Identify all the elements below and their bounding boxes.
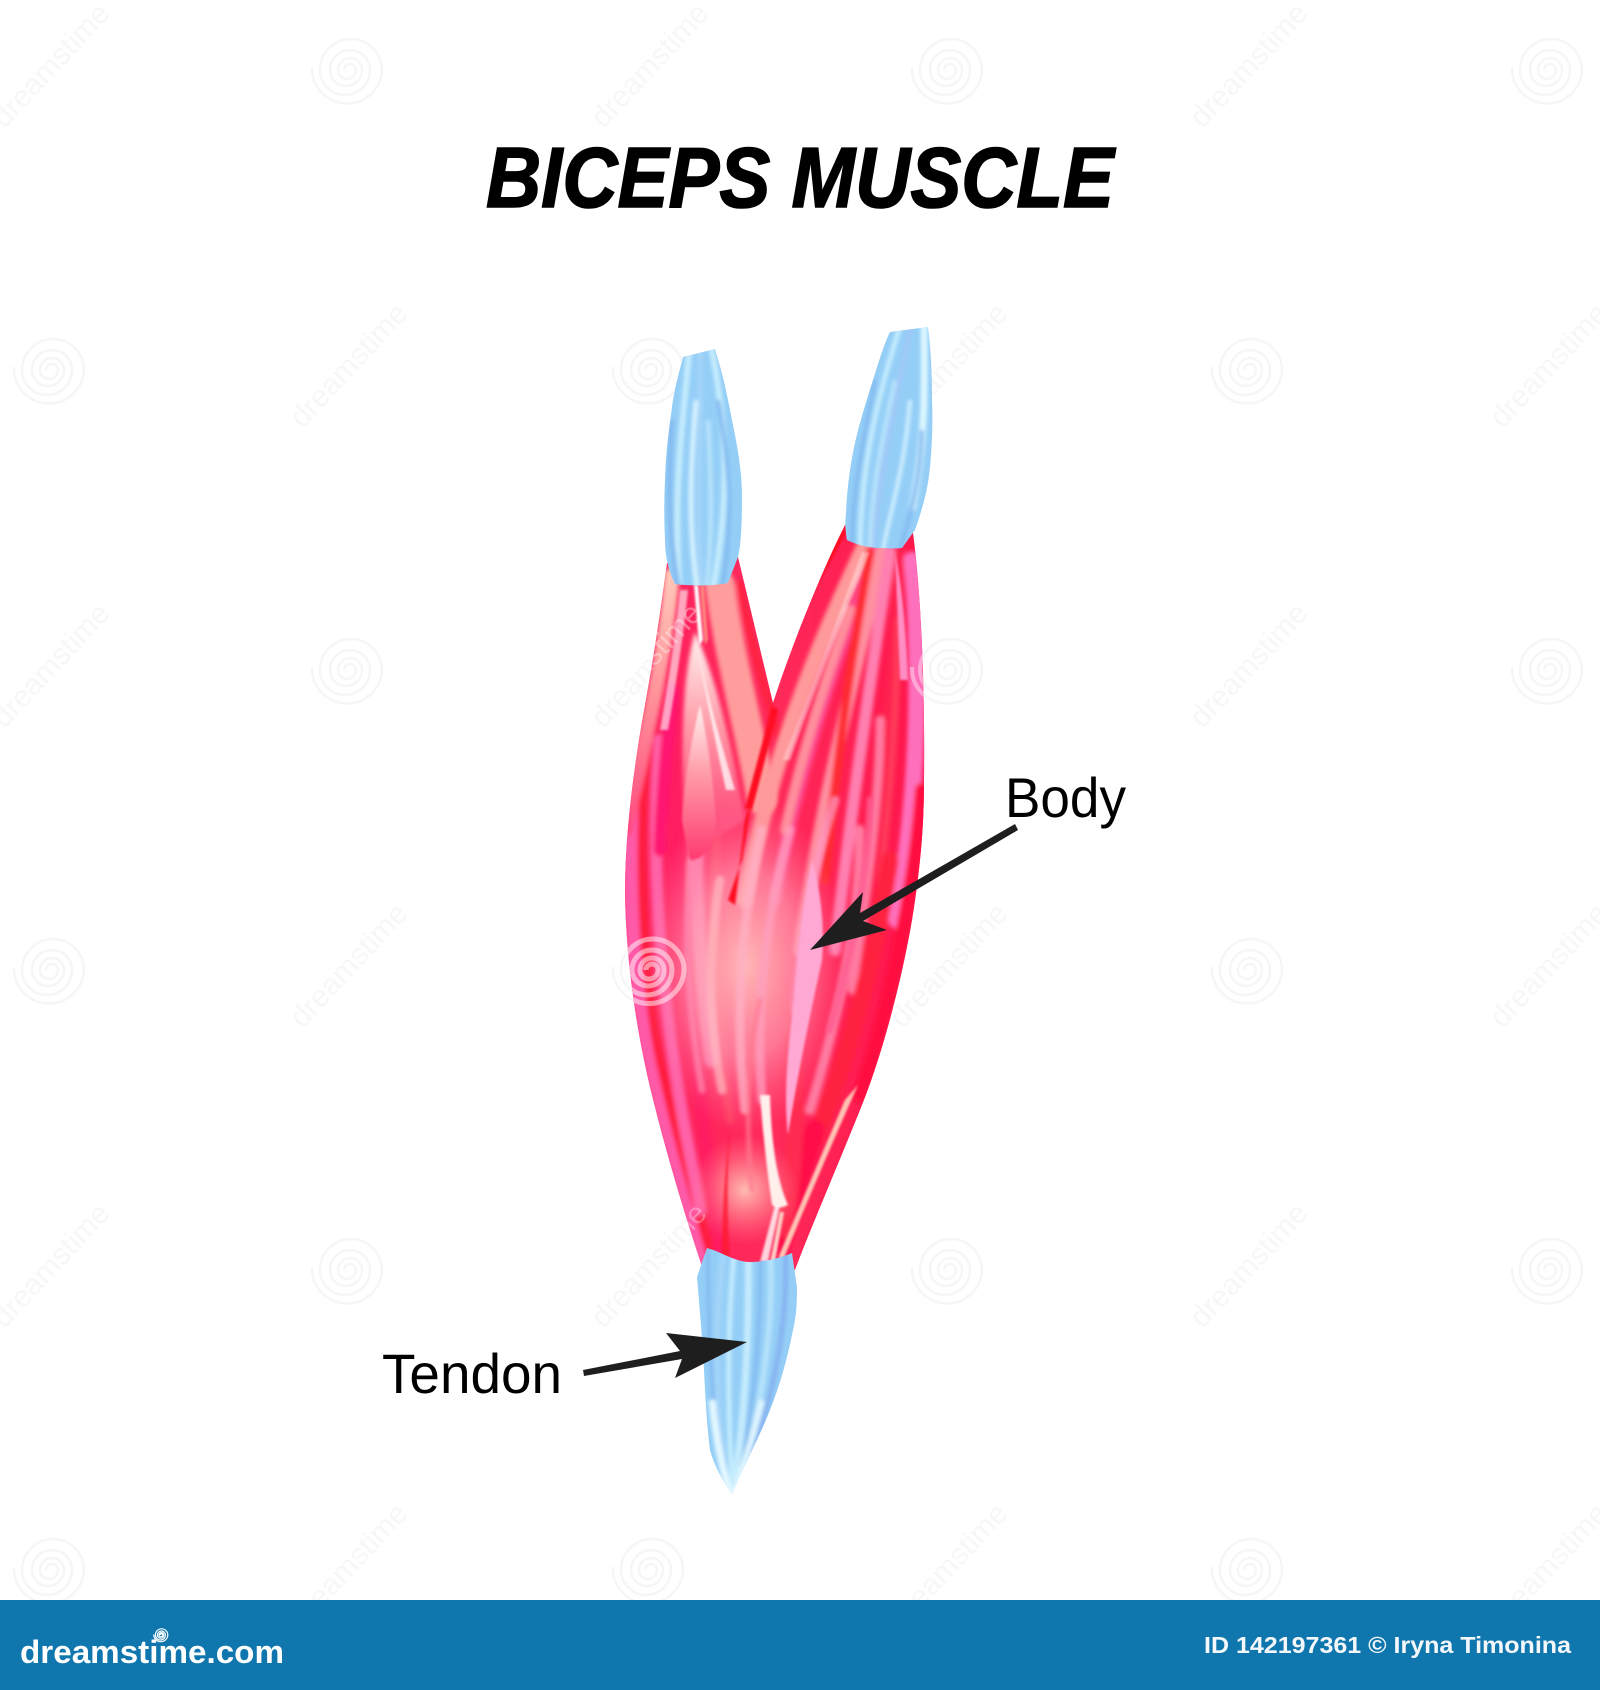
crisp highlights xyxy=(660,525,908,1262)
upper right tendon xyxy=(845,327,932,548)
watermark over muscle: dreamstime xyxy=(578,597,709,734)
fibres: left head xyxy=(625,575,778,1280)
label: Tendon: Tendon xyxy=(382,1342,562,1405)
watermark pattern: dreamstime xyxy=(884,1497,1015,1634)
upper left tendon xyxy=(664,349,742,586)
watermark pattern: dreamstime xyxy=(585,597,716,734)
muscle body xyxy=(625,525,924,1270)
arrow: Body xyxy=(810,824,1018,950)
watermark pattern: dreamstime xyxy=(284,1497,415,1634)
watermark pattern: dreamstime xyxy=(884,897,1015,1034)
watermark over muscle xyxy=(628,607,924,1230)
central glow xyxy=(649,810,840,1122)
watermark pattern: dreamstime xyxy=(585,0,716,134)
label: Body: Body xyxy=(1005,766,1126,829)
teardrop: left head xyxy=(683,632,745,842)
footer credit: ID 142197361 © Iryna Timonina xyxy=(1204,1632,1571,1658)
title: BICEPS MUSCLE xyxy=(486,131,1116,226)
footer logo: dreamstime.com xyxy=(20,1634,284,1670)
watermark over muscle: dreamstime xyxy=(583,1197,714,1334)
watermark pattern: dreamstime xyxy=(284,297,415,434)
footer banner xyxy=(0,1600,1600,1690)
watermark pattern: dreamstime xyxy=(1184,1197,1315,1334)
watermark pattern: dreamstime xyxy=(1184,0,1315,134)
arrow: Tendon xyxy=(583,1333,747,1378)
pale fibres over glow xyxy=(688,800,870,1190)
biceps muscle illustration xyxy=(625,327,932,1495)
fibres: right head xyxy=(745,545,922,1280)
watermark pattern: dreamstime xyxy=(585,1197,716,1334)
watermark pattern: dreamstime xyxy=(1184,597,1315,734)
lower tendon xyxy=(697,1248,797,1495)
watermark pattern: dreamstime xyxy=(884,297,1015,434)
watermark pattern: dreamstime xyxy=(284,897,415,1034)
